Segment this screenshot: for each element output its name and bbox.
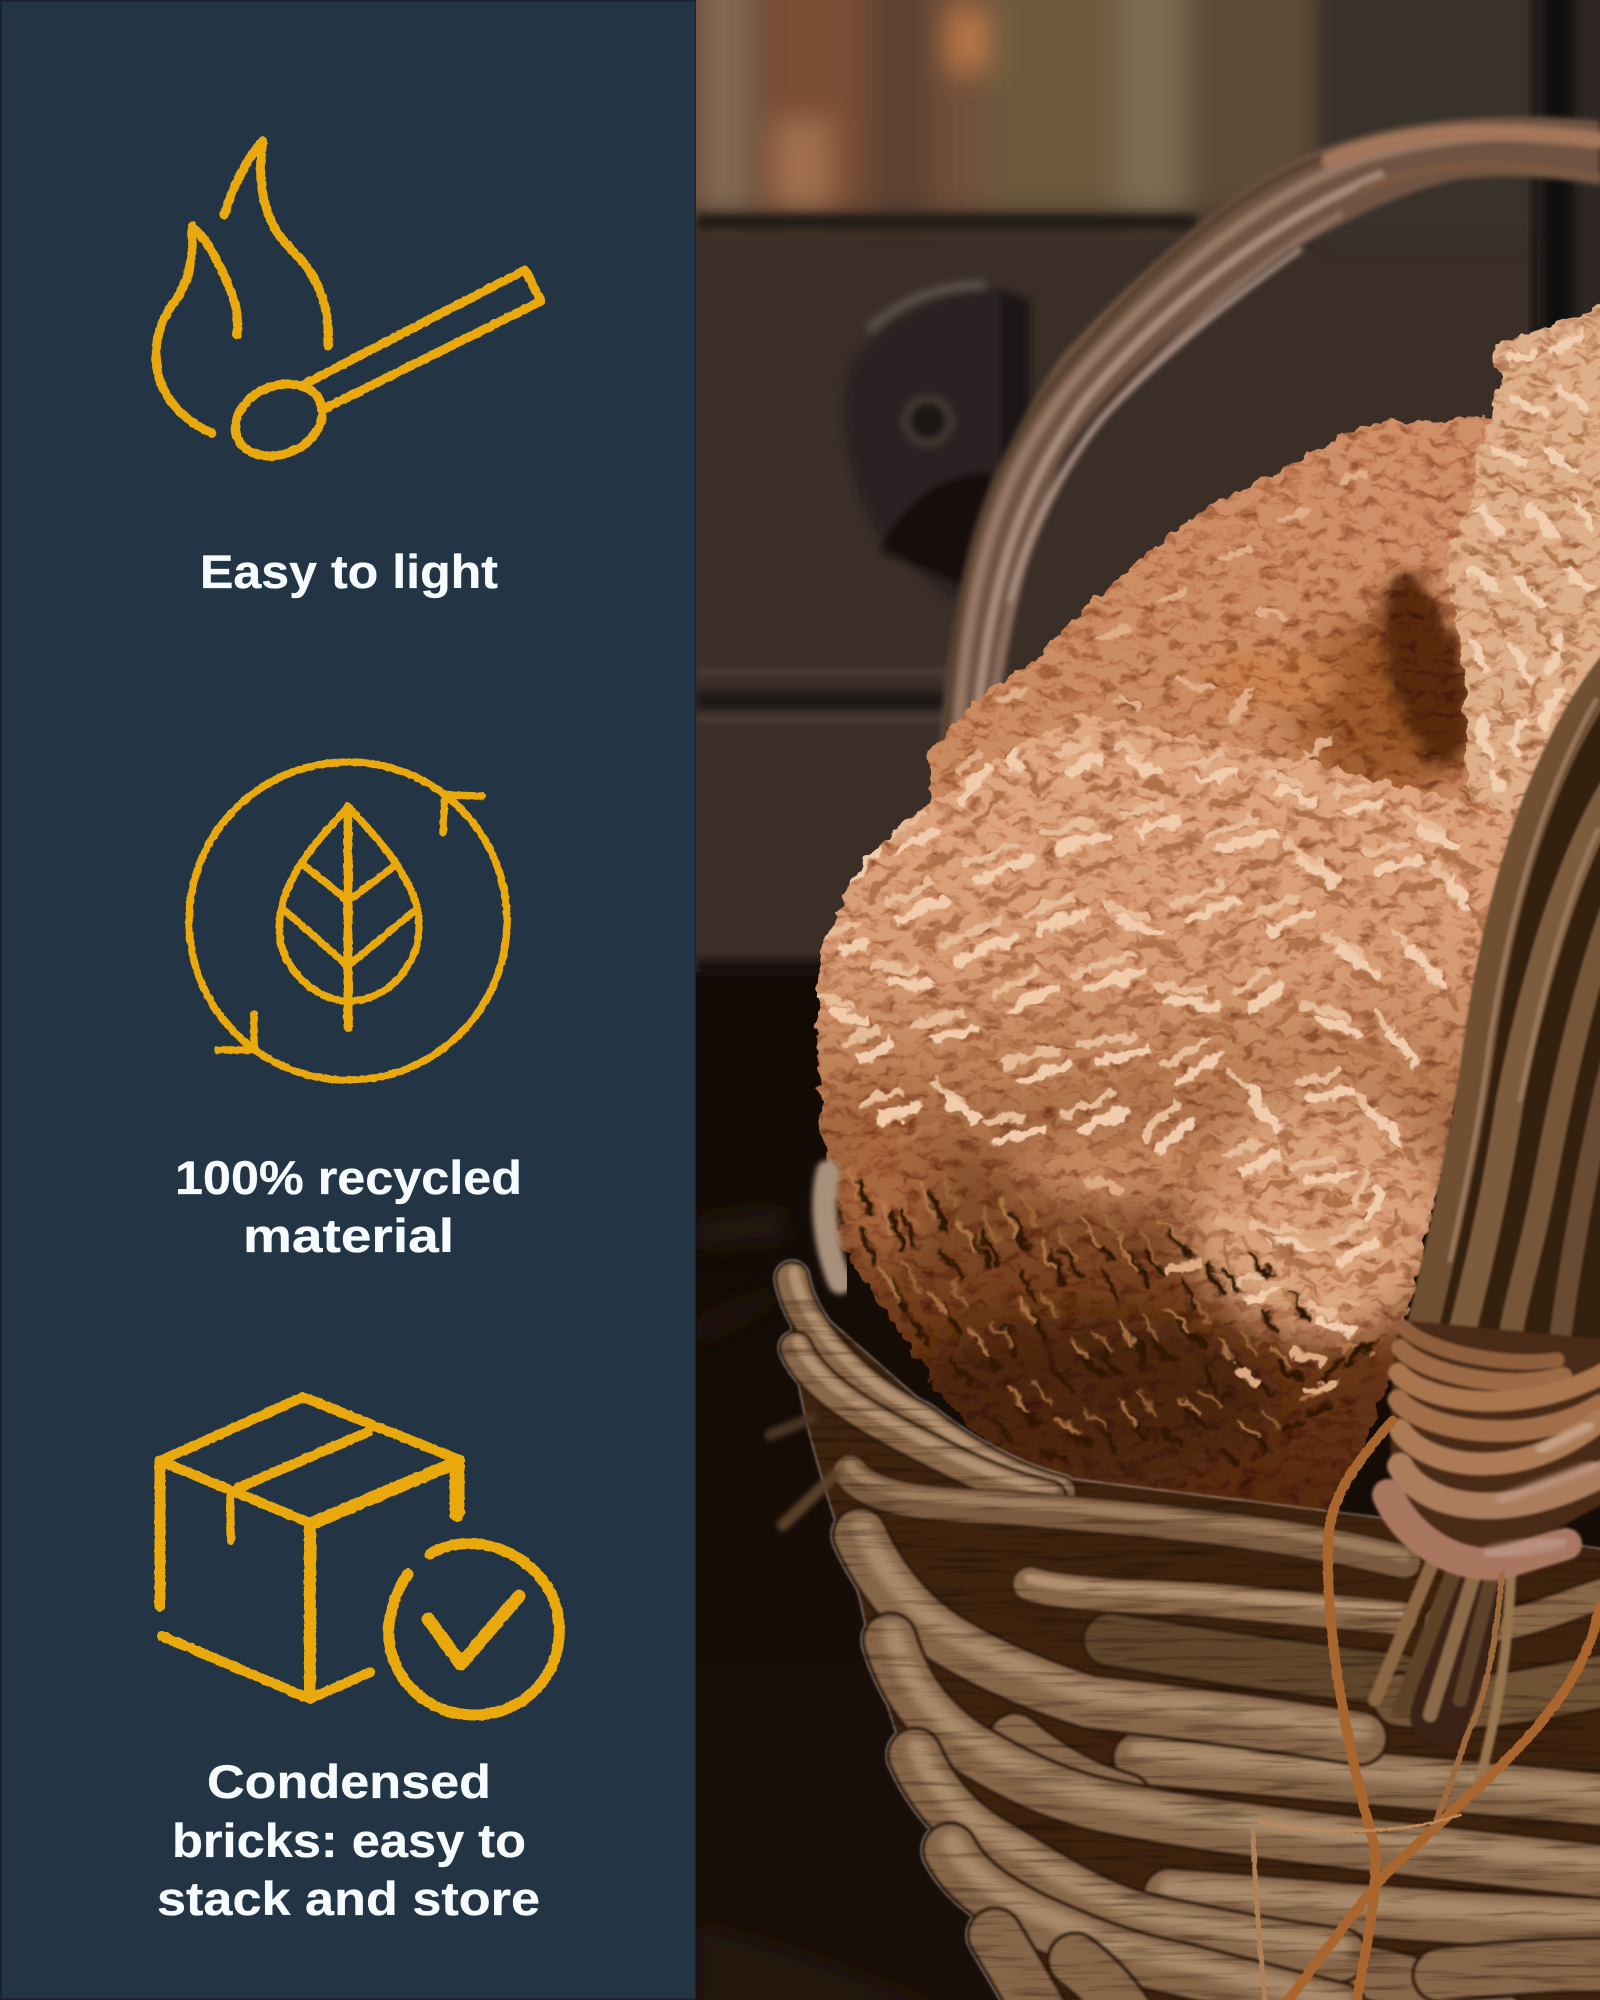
pale wood chips — [816, 724, 1488, 1352]
label: 100% recycled material: 100% recycled — [175, 1151, 522, 1204]
leaf — [279, 807, 419, 1027]
front basket handle — [1410, 650, 1600, 1370]
label: condensed bricks: bricks: easy to — [172, 1814, 526, 1867]
label: condensed bricks: Condensed — [207, 1755, 491, 1808]
twine — [1253, 1421, 1600, 2000]
icon: box with checkmark — [160, 1397, 559, 1715]
label: easy to light: Easy to light — [200, 545, 498, 598]
wood brick: front — [800, 700, 1540, 1520]
basket rim pale end and loose fibres — [770, 1172, 840, 1525]
torn fibres on lower brick — [832, 1162, 1382, 1466]
handle fan below binding — [1375, 1530, 1512, 1780]
basket rear handle — [938, 117, 1600, 790]
handle binding wraps — [1388, 1320, 1600, 1564]
wood brick: back — [926, 414, 1525, 822]
panel: benefits sidebar — [0, 0, 697, 2000]
label: condensed bricks: stack and store — [157, 1872, 540, 1925]
basket weave — [790, 1272, 1600, 2000]
photo backdrop: stove — [660, 0, 1600, 2000]
label: condensed bricks — [157, 1755, 540, 1925]
label: 100% recycled material: material — [243, 1209, 454, 1262]
photo: basket of wood briquettes — [660, 0, 1600, 2000]
wood brick: right — [1448, 300, 1600, 822]
label: 100% recycled material — [175, 1151, 522, 1262]
floor reflections — [699, 1210, 886, 2000]
check circle — [389, 1543, 559, 1715]
icon: match and flames — [156, 141, 541, 469]
stove latch — [844, 285, 1030, 600]
recycling ring — [189, 762, 507, 1080]
box — [160, 1397, 460, 1699]
icon: leaf in recycling circle — [189, 762, 507, 1080]
